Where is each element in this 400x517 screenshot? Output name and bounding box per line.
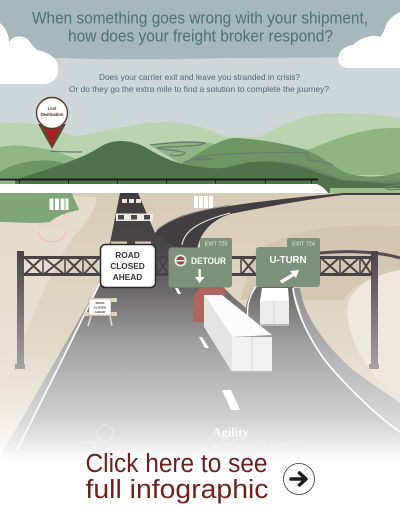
overhead gantry xyxy=(15,251,379,369)
agility ghost text: Agility xyxy=(212,426,249,440)
icon: arrow button xyxy=(284,464,314,494)
subtitle text: Does your carrier exit and leave you stranded in crisis? xyxy=(99,72,300,82)
sign: u-turn xyxy=(256,238,320,287)
ramp edge line xyxy=(247,287,256,318)
exit ramp outer line xyxy=(157,205,230,230)
main road xyxy=(0,193,400,465)
left post xyxy=(17,251,24,365)
sign: detour xyxy=(168,238,232,288)
agility ghost text xyxy=(212,426,302,450)
sign: road closed ahead xyxy=(100,244,156,288)
lost destination pin: Destination xyxy=(41,112,64,117)
ramp inner line xyxy=(182,213,230,245)
cloud right xyxy=(338,12,400,68)
icon: detour badge xyxy=(174,254,186,266)
truss xyxy=(24,257,372,275)
icon: up-right arrow xyxy=(280,270,299,284)
call to action text xyxy=(86,450,269,504)
exit 724 tab: EXIT 724 xyxy=(292,242,315,248)
icon: down arrow xyxy=(195,269,204,283)
title xyxy=(32,10,368,46)
ground curves xyxy=(240,225,400,300)
subtitle text xyxy=(69,72,329,94)
ghost icon xyxy=(80,425,113,452)
sign: road closed ahead: ROAD xyxy=(115,250,140,260)
sign: u-turn: U-TURN xyxy=(270,254,306,266)
small road closed barricade: AHEAD xyxy=(95,310,106,314)
small road closed barricade: CLOSED xyxy=(94,306,107,310)
big truck xyxy=(204,295,272,373)
small road closed barricade: ROAD xyxy=(96,301,105,305)
cloud left xyxy=(0,23,58,84)
sign: road closed ahead: CLOSED xyxy=(110,261,145,271)
ground xyxy=(0,193,400,463)
agility ghost text: Be the road block for the test xyxy=(212,443,302,450)
dark cloud band xyxy=(0,0,400,59)
ghost pin outline xyxy=(38,208,66,242)
lane dashes xyxy=(175,288,240,410)
bridge railing xyxy=(0,178,318,184)
winding road on hills xyxy=(50,142,400,190)
far road white barriers xyxy=(50,196,213,210)
title: When something goes wrong with your shipment, xyxy=(32,10,368,28)
green patch left xyxy=(0,193,79,223)
sky background xyxy=(0,0,400,200)
road edge line right xyxy=(293,288,400,432)
distant barricades xyxy=(111,199,153,244)
rear truck xyxy=(260,288,289,326)
call to action text: Click here to see xyxy=(86,450,268,478)
red truck cab behind xyxy=(193,288,225,322)
sign: detour: DETOUR xyxy=(191,256,226,266)
lost destination pin: Lost xyxy=(48,106,57,111)
subtitle text: Or do they go the extra mile to find a solution to complete the journey? xyxy=(69,84,329,94)
bridge white band xyxy=(0,184,328,193)
call to action text: full infographic xyxy=(86,476,269,504)
hills landscape xyxy=(0,113,400,195)
right post xyxy=(371,251,378,365)
road shoulder left xyxy=(0,283,104,466)
exit 725 tab: EXIT 725 xyxy=(205,242,227,248)
small road closed barricade xyxy=(84,298,117,326)
far road behind gantry xyxy=(320,252,400,258)
sign: road closed ahead: AHEAD xyxy=(113,272,142,282)
lost destination pin xyxy=(36,98,68,149)
road shoulder right xyxy=(293,288,400,440)
exit ramp xyxy=(150,193,400,268)
title: how does your freight broker respond? xyxy=(68,28,333,46)
road edge line left xyxy=(17,283,100,450)
